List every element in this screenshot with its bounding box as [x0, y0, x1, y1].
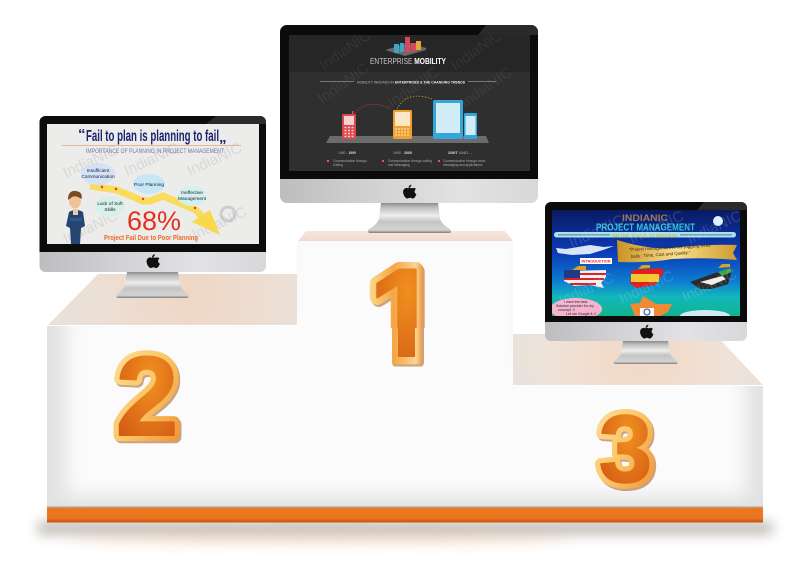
screen: project management — [552, 210, 740, 316]
cloud: insufficient communication: Communication — [81, 174, 115, 180]
watermarks: IndiaNIC — [61, 141, 121, 182]
cloud: insufficient communication: Insufficient — [87, 168, 110, 174]
number 1: 1 — [370, 244, 441, 386]
watermarks: IndiaNIC — [557, 269, 617, 310]
number 3: 3 — [599, 396, 652, 503]
watermarks: IndiaNIC — [190, 203, 250, 244]
falling arrow — [90, 186, 220, 235]
map: usa — [564, 266, 606, 288]
watermarks: IndiaNIC — [122, 139, 182, 180]
watermarks: IndiaNIC — [317, 27, 374, 74]
icon: apple logo — [640, 325, 653, 338]
timeline columns: 1990 - 2000 — [393, 151, 412, 155]
screen: fail to plan — [47, 124, 259, 248]
cloud: lack of soft skills: Lack of Soft — [97, 201, 123, 207]
monitor body — [280, 25, 538, 203]
watermarks: IndiaNIC — [458, 64, 515, 111]
airplane — [556, 245, 614, 255]
timeline columns: messaging and applications — [443, 163, 483, 167]
timeline columns: and Messaging — [388, 163, 410, 167]
tagline bar — [554, 232, 736, 238]
map: uae — [690, 264, 732, 289]
watermarks: IndiaNIC — [185, 139, 245, 180]
businessman — [66, 191, 85, 244]
subheading: MOBILITY INROADS IN ENTERPRISES & THE CHANGING TRENDS — [357, 80, 466, 84]
podium front — [47, 326, 763, 506]
podium — [47, 225, 763, 522]
watermarks: IndiaNIC — [448, 27, 505, 74]
number 1: 1 — [369, 242, 439, 384]
pink cloud note: I want the best — [564, 300, 587, 304]
introduction tag — [580, 258, 612, 264]
watermarks: IndiaNIC — [685, 207, 745, 248]
monitor: third place — [545, 202, 747, 364]
timeline columns: Calling — [333, 163, 343, 167]
podium top: first place — [298, 231, 513, 241]
device: blue phone — [464, 113, 477, 139]
shelf — [326, 136, 489, 143]
monitor: second place — [40, 116, 266, 298]
cloud: poor planning — [133, 174, 165, 194]
pink cloud note: Solution provider for my — [556, 304, 594, 308]
tagline bar: ON THE TRACK TO SUCCESS — [612, 233, 678, 238]
subtitle: IMPORTANCE OF PLANNING IN PROJECT MANAGEMENT — [86, 148, 224, 155]
68 percent: 68% — [127, 206, 181, 236]
timeline columns: 2007 AND... — [448, 151, 472, 155]
dashed arcs — [355, 96, 432, 113]
watermarks: IndiaNIC — [680, 265, 740, 306]
pink cloud note — [550, 298, 602, 320]
screen: enterprise mobility — [289, 27, 530, 171]
screen: project management: PROJECT MANAGEMENT — [596, 222, 695, 234]
timeline columns: Communication through voice, — [443, 159, 486, 163]
monitor stand — [368, 203, 451, 233]
map: spain — [630, 265, 664, 288]
icon: apple logo — [403, 185, 416, 198]
timeline columns: 1980 - 1990 — [338, 151, 356, 155]
screen: fail to plan: “ — [78, 126, 86, 143]
pink cloud note: Let me Google it..!! — [566, 312, 596, 316]
podium shadow — [38, 522, 772, 544]
introduction tag: INTRODUCTION — [581, 260, 611, 264]
white cloud — [680, 310, 730, 322]
cloud: ineffective management — [177, 186, 207, 206]
screen: fail to plan: ” — [219, 137, 226, 154]
timeline columns: Communication through — [333, 159, 367, 163]
number 1 — [370, 262, 425, 366]
icon: apple logo — [147, 254, 160, 268]
monitor body — [545, 202, 747, 341]
number 1: 1 — [369, 242, 439, 384]
number 2: 2 — [117, 336, 180, 461]
device: orange handset — [393, 110, 412, 139]
number 3: 3 — [600, 398, 654, 505]
number 2: 2 — [116, 334, 178, 459]
watermarks — [557, 207, 745, 310]
watermarks — [318, 35, 511, 107]
orange base band — [47, 506, 763, 522]
title: INDIANIC — [622, 213, 669, 223]
gold banner: "Project management is like juggling three — [629, 243, 711, 252]
heading: ENTERPRISE MOBILITY — [370, 57, 447, 66]
cloud: poor planning: Poor Planning — [134, 182, 164, 188]
city logo — [385, 37, 426, 56]
cloud: lack of soft skills — [95, 196, 125, 216]
number 2: 2 — [116, 334, 178, 459]
watermarks: IndiaNIC — [617, 267, 677, 308]
monitor: first place — [280, 25, 538, 233]
watermarks: IndiaNIC — [385, 64, 442, 111]
quote title: Fail to plan is planning to fail — [86, 128, 219, 145]
gold banner: balls : Time, Cost and Quality." — [631, 250, 691, 259]
podium top: third place — [513, 334, 763, 385]
cloud: ineffective management: Ineffective — [181, 190, 203, 196]
timeline columns — [327, 151, 486, 167]
pink cloud note: concept..!! — [558, 308, 575, 312]
watermarks: IndiaNIC — [627, 207, 687, 248]
watermarks: IndiaNIC — [567, 211, 627, 252]
monitor body — [40, 116, 266, 272]
watermarks — [63, 144, 246, 244]
gold banner — [617, 240, 737, 262]
map: india — [630, 296, 672, 316]
timeline columns: Communication through calling — [388, 159, 432, 163]
watermarks: IndiaNIC — [61, 207, 121, 248]
number 3: 3 — [599, 396, 652, 503]
watermarks: IndiaNIC — [315, 60, 372, 107]
caption: Project Fail Due to Poor Planning — [104, 233, 198, 242]
podium top: second place — [48, 274, 297, 325]
cloud: insufficient communication — [81, 163, 115, 185]
monitor stand — [613, 341, 678, 364]
device: red phone — [342, 111, 356, 139]
cloud: ineffective management: Management — [178, 196, 207, 202]
moon — [713, 216, 723, 226]
device: blue tablet — [433, 100, 463, 139]
cloud: lack of soft skills: Skills — [104, 207, 116, 213]
monitor stand — [116, 272, 189, 298]
